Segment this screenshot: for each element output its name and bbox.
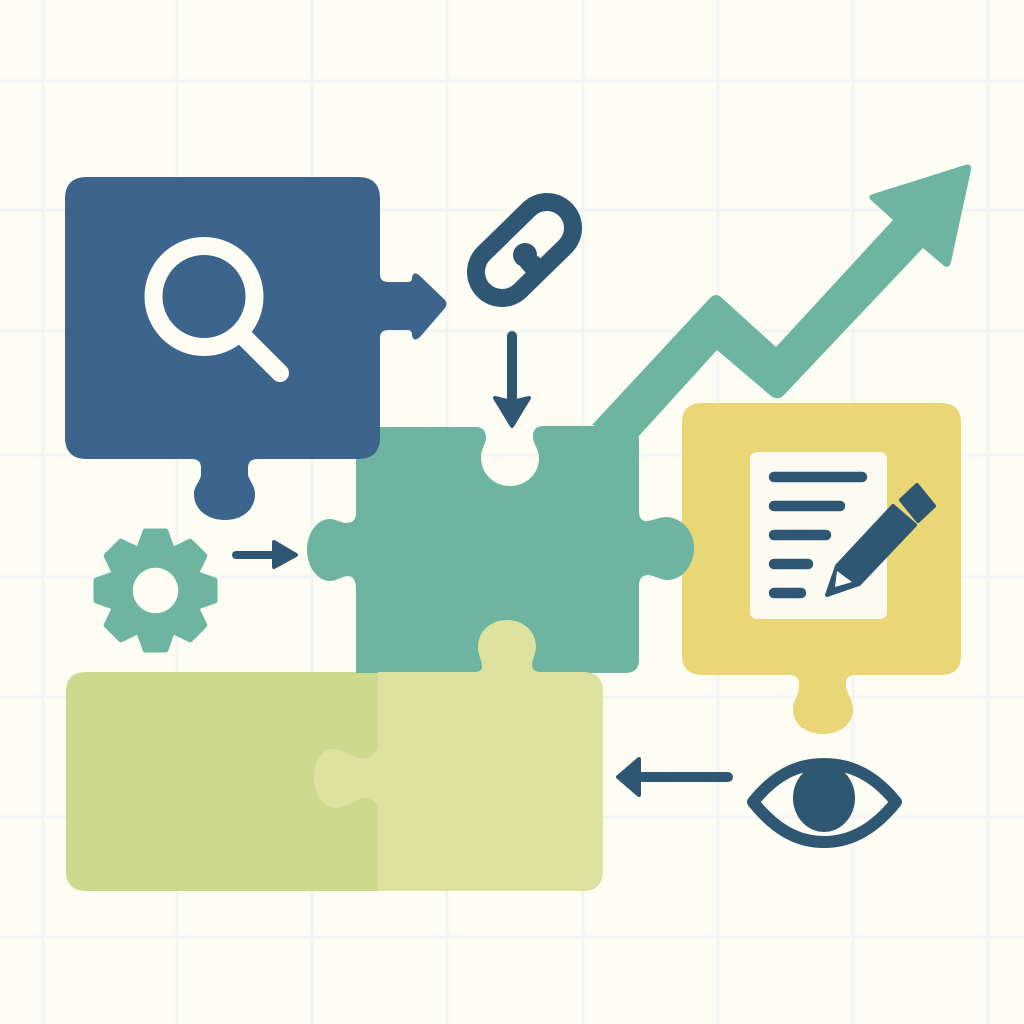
arrow: eye to light green piece (618, 759, 728, 795)
light green puzzle piece right half with top knob (314, 620, 603, 891)
light green puzzle piece left half (66, 672, 378, 891)
icon: chain link (467, 193, 582, 307)
icon: pencil (827, 485, 934, 595)
icon: gear (96, 532, 214, 650)
document lines (774, 477, 862, 593)
green growth arrow (592, 165, 971, 437)
arrow: link down to teal piece (495, 336, 529, 426)
yellow puzzle piece with document (682, 403, 961, 734)
icon: eye (753, 764, 896, 842)
central teal puzzle piece (307, 426, 694, 673)
arrow: gear to teal piece (236, 542, 296, 567)
icon: magnifying glass (154, 246, 280, 373)
icon: document (750, 452, 887, 619)
blue puzzle piece with magnifier (65, 177, 446, 520)
